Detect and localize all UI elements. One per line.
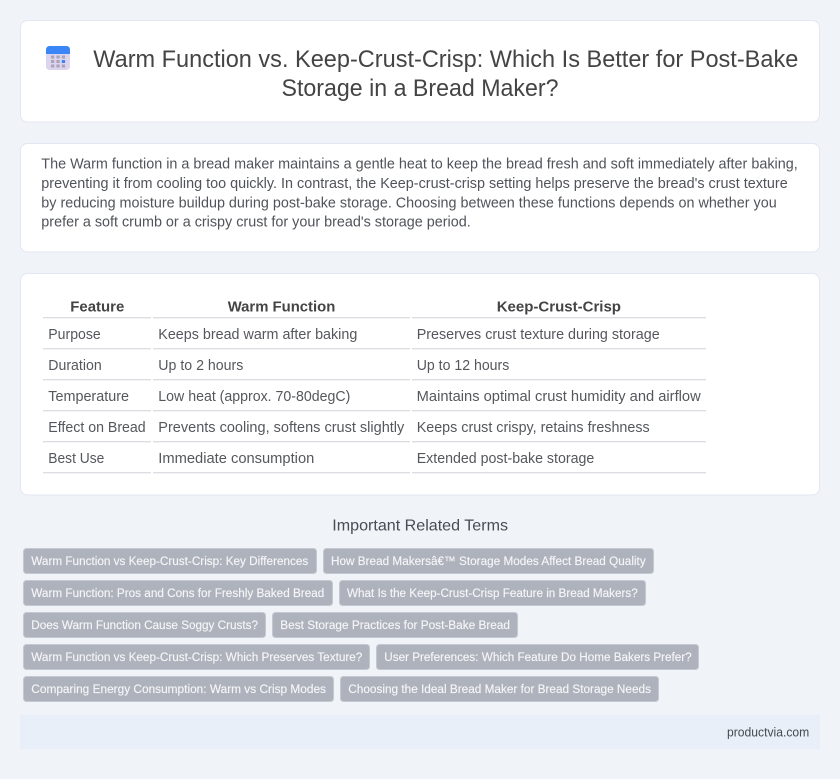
table row: purpose: Keeps bread warm after baking [158,327,357,343]
panel: title card [20,20,820,122]
tag: Comparing Energy Consumption: Warm vs Crisp Modes [31,682,326,696]
table header row: Keep-Crust-Crisp [497,299,621,316]
tag [24,676,334,702]
title: Warm Function vs. Keep-Crust-Crisp: Which Is Better for Post-Bake [93,46,798,73]
table header row: Feature [70,299,124,316]
table row: effect on bread: Prevents cooling, softens crust slightly [158,420,405,436]
tag [24,612,266,638]
table row: best use: Immediate consumption [158,451,314,467]
table row: purpose [43,327,706,349]
tag: Warm Function vs Keep-Crust-Crisp: Which Preserves Texture? [31,650,363,664]
tag: What Is the Keep-Crust-Crisp Feature in Bread Makers? [347,586,638,600]
panel: comparison table [20,274,820,495]
tag [24,548,316,574]
table row: best use: Best Use [48,451,104,467]
tag: Choosing the Ideal Bread Maker for Bread Storage Needs [348,682,651,696]
table row: effect on bread [43,420,706,442]
tag [340,676,658,702]
table row: effect on bread: Effect on Bread [48,420,146,436]
text block: description paragraph: preventing it from cooling too quickly. In contrast, the Keep-crust-crisp setting helps preserve the bread's crust texture [41,176,788,192]
heading: related terms: Important Related Terms [332,518,508,535]
table row: temperature: Temperature [48,389,129,405]
table row: purpose: Preserves crust texture during storage [417,327,660,343]
related terms tags [24,548,698,702]
tag [24,644,370,670]
table header row [43,299,706,318]
table row: duration: Up to 12 hours [417,358,509,374]
text block: description paragraph: The Warm function in a bread maker maintains a gentle heat to keep the bread fresh and soft immediately after baking, [41,156,798,172]
table row: duration: Up to 2 hours [158,358,243,374]
footer [20,715,820,749]
tag: Warm Function vs Keep-Crust-Crisp: Key Differences [31,554,308,568]
tag: Does Warm Function Cause Soggy Crusts? [31,618,258,632]
title: Storage in a Bread Maker? [282,75,558,102]
table row: effect on bread: Keeps crust crispy, retains freshness [417,420,650,436]
table row: temperature [43,389,706,411]
table row: duration: Duration [48,358,102,374]
table row: best use: Extended post-bake storage [417,451,594,467]
table row: temperature: Low heat (approx. 70-80degC) [158,389,350,405]
table header row: Warm Function [228,299,335,316]
table row: duration [43,358,706,380]
tag [324,548,654,574]
text block: description paragraph [41,156,798,231]
table row: purpose: Purpose [48,327,101,343]
tag: Best Storage Practices for Post-Bake Bread [280,618,510,632]
title [93,46,798,102]
table row: best use [43,451,706,473]
tag [376,644,698,670]
tag: User Preferences: Which Feature Do Home Bakers Prefer? [384,650,692,664]
panel: description [20,144,820,252]
text block: description paragraph: prefer a soft crumb or a crispy crust for your bread's storage period. [41,215,471,231]
text block: description paragraph: by reducing moisture buildup during post-bake storage. Choosing between these functions depends on whether you [41,195,777,211]
tag: Warm Function: Pros and Cons for Freshly Baked Bread [31,586,324,600]
icon: calendar [46,46,70,70]
tag: How Bread Makersâ€™ Storage Modes Affect Bread Quality [331,554,647,568]
tag [24,580,332,606]
footer source text: productvia.com [727,726,809,740]
table row: temperature: Maintains optimal crust humidity and airflow [417,389,701,405]
tag [272,612,518,638]
tag [340,580,646,606]
